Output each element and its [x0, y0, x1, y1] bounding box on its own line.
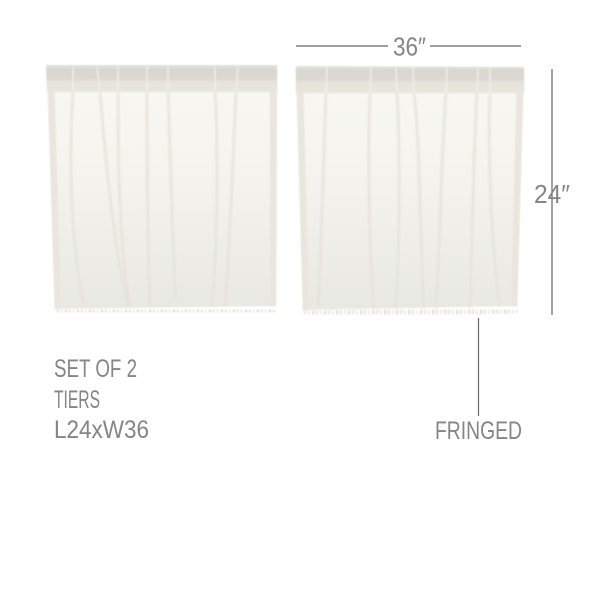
product details text: L24xW36 [54, 416, 149, 444]
side hems [296, 70, 524, 310]
width dimension: 36 inches: 36″ [393, 32, 426, 62]
folds [318, 93, 500, 308]
curtain panel: right [296, 66, 524, 314]
header band [296, 66, 524, 93]
product details text: SET OF 2 [54, 355, 137, 383]
folds [71, 92, 236, 306]
fringe [304, 310, 517, 314]
height dimension: 24 inches: 24″ [534, 179, 570, 209]
header band [46, 65, 277, 92]
curtain body [47, 70, 277, 309]
fringed callout [435, 318, 522, 445]
band pleats [73, 66, 238, 92]
fringe [57, 310, 276, 312]
curtain body [296, 70, 524, 310]
product details text: TIERS [54, 386, 100, 414]
side hems [47, 70, 277, 309]
band pleats [326, 67, 490, 93]
product details text [54, 355, 149, 444]
curtain panel: left [46, 65, 277, 312]
fringed callout: FRINGED [435, 417, 522, 445]
